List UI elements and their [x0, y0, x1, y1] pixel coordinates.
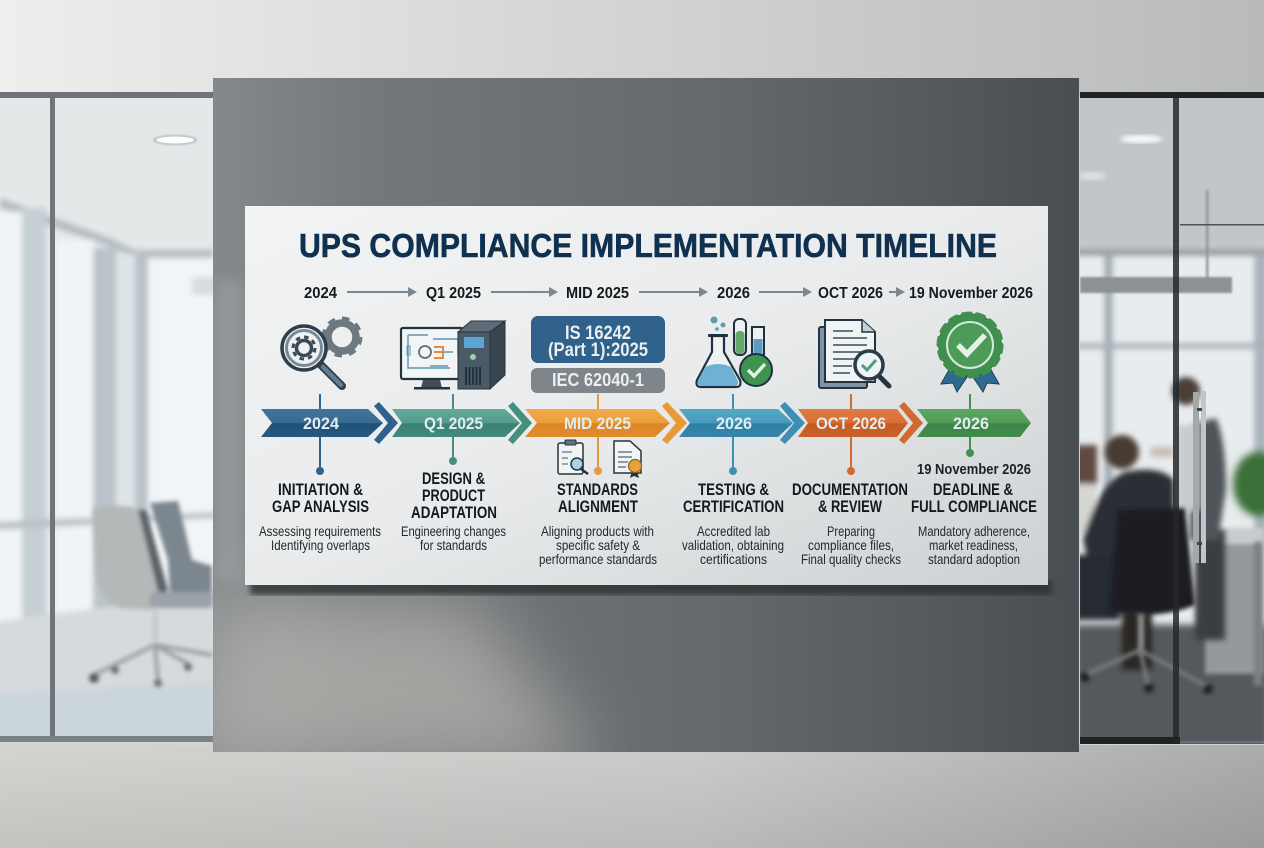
connector dots: [316, 449, 974, 475]
top date row: OCT 2026: [818, 285, 883, 302]
chevron Q1 2025: Q1 2025: [424, 415, 483, 433]
text block: OCT 2026: & REVIEW: [818, 498, 882, 516]
text block: MID 2025: Aligning products with: [541, 523, 654, 539]
table: [1205, 528, 1264, 686]
chair in front of people: [1080, 508, 1213, 694]
icon: green certification badge: [939, 314, 1001, 392]
text block: Q1 2025: ADAPTATION: [411, 504, 497, 522]
chevron MID 2025: MID 2025: [564, 415, 631, 433]
banner shadow: [250, 580, 1052, 595]
timeline connectors: [320, 394, 970, 471]
chevron 2026: 2026: [716, 415, 752, 433]
chevron 2026: [679, 402, 805, 444]
text block: MID 2025: STANDARDS: [557, 481, 638, 499]
panel: banner: [245, 206, 1048, 585]
text block: Q1 2025: DESIGN &: [422, 470, 485, 488]
text block: 2026: certifications: [700, 551, 767, 567]
text block: deadline: 19 November 2026: [917, 461, 1031, 478]
text block: OCT 2026: [792, 481, 908, 567]
text block: 2026: CERTIFICATION: [683, 498, 784, 516]
top date row: 2024: [304, 285, 337, 302]
text block: deadline: standard adoption: [928, 551, 1020, 567]
standard badge: IS 16242: [531, 316, 665, 363]
text block: Q1 2025: PRODUCT: [422, 487, 485, 505]
text block: deadline: Mandatory adherence,: [918, 523, 1030, 539]
text block: MID 2025: performance standards: [539, 551, 657, 567]
text block: MID 2025: ALIGNMENT: [558, 498, 638, 516]
right glass partition view: [1075, 92, 1264, 750]
top date row: 19 November 2026: [909, 285, 1033, 302]
text block: OCT 2026: compliance files,: [808, 537, 894, 553]
chevron 2024: 2024: [303, 415, 340, 433]
text block: Q1 2025: [401, 470, 506, 553]
ceiling lights right: [1120, 135, 1162, 143]
text block: 2024: GAP ANALYSIS: [272, 498, 369, 516]
text block: 2026: [682, 481, 784, 567]
blurred people: [1075, 377, 1226, 670]
icon: certificate document: [614, 441, 642, 478]
title: UPS COMPLIANCE IMPLEMENTATION TIMELINE: [299, 227, 997, 264]
standard badge: IEC 62040-1: [531, 368, 665, 393]
icon: computer with circuit diagram: [401, 321, 505, 390]
standard badge: IS 16242: IS 16242: [565, 323, 631, 344]
dark floor: [1075, 625, 1264, 750]
floor: [0, 745, 1264, 848]
chevron Q1 2025: [392, 402, 532, 444]
text block: 2024: Assessing requirements: [259, 523, 381, 539]
text block: deadline: FULL COMPLIANCE: [911, 498, 1037, 516]
grey feature wall: [190, 78, 1079, 770]
top date row: [304, 285, 1033, 302]
top date row: MID 2025: [566, 285, 629, 302]
chevron MID 2025: [525, 402, 687, 444]
icon: flask and test tubes: [696, 316, 772, 387]
text block: Q1 2025: Engineering changes: [401, 523, 506, 539]
chevron final 2026: 2026: [953, 415, 989, 433]
text block: 2026: validation, obtaining: [682, 537, 784, 553]
text block: OCT 2026: Preparing: [827, 523, 875, 539]
chevron OCT 2026: [798, 402, 923, 444]
chevron OCT 2026: OCT 2026: [816, 415, 886, 433]
text block: Q1 2025: for standards: [420, 537, 487, 553]
chevron final 2026: [917, 409, 1031, 437]
text block: 2026: Accredited lab: [697, 523, 770, 539]
text block: 2026: TESTING &: [698, 481, 769, 499]
text block: MID 2025: specific safety &: [556, 537, 641, 553]
door handle: [1193, 391, 1206, 563]
text block: 2024: Identifying overlaps: [271, 537, 370, 553]
pendant lamp: [1080, 190, 1232, 293]
left glass partition view: [0, 92, 218, 745]
ceiling: [0, 0, 1264, 95]
blurred plant: [1233, 452, 1264, 516]
top date row: Q1 2025: [426, 285, 481, 302]
right window frame: [1080, 92, 1264, 744]
text block: 2024: [259, 481, 381, 553]
door top rail: [1180, 224, 1264, 226]
text block: MID 2025: [539, 481, 657, 567]
icon: document with magnifier: [819, 320, 889, 388]
left window frame: [0, 92, 213, 742]
icon: gears and magnifier: [282, 318, 360, 386]
standard badge: IEC 62040-1: IEC 62040-1: [552, 370, 644, 390]
text block: OCT 2026: DOCUMENTATION: [792, 481, 908, 499]
ceiling light left: [153, 135, 197, 145]
text block: 2024: INITIATION &: [278, 481, 363, 499]
text block: OCT 2026: Final quality checks: [801, 551, 901, 567]
standard badge: IS 16242: (Part 1):2025: [548, 340, 648, 361]
text block: deadline: market readiness,: [929, 537, 1018, 553]
text block: deadline: [911, 461, 1037, 567]
office chair left: [89, 501, 213, 687]
icon: clipboard with magnifier: [558, 440, 588, 474]
chevron 2024: [261, 402, 398, 444]
text block: deadline: DEADLINE &: [933, 481, 1013, 499]
top date row: 2026: [717, 285, 750, 302]
